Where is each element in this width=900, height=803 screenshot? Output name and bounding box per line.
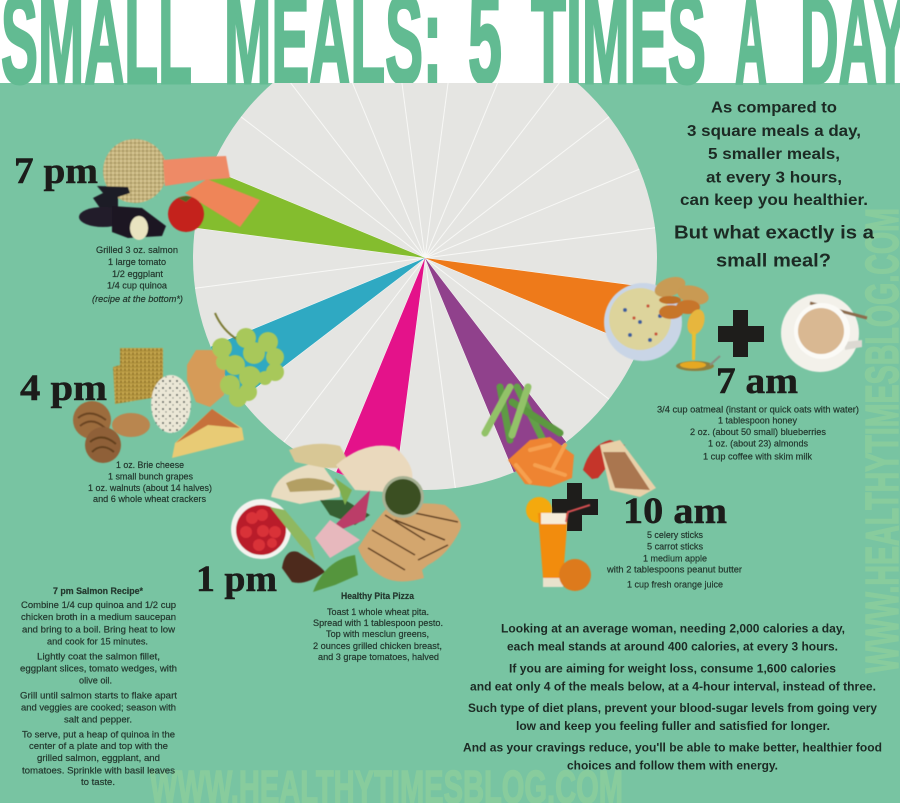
- food group: 4 pm: [73, 313, 284, 463]
- text: calories explanation: each meal stands at around 400 calories, at every 3 hours.: [507, 640, 838, 654]
- food group: 7 am: [604, 273, 867, 372]
- text: 7 am ingredients: [657, 405, 859, 461]
- text: salmon recipe: and cook for 15 minutes.: [47, 637, 148, 647]
- text: 10 am ingredients: 5 carrot sticks: [647, 541, 704, 551]
- text: 7 pm ingredients: [92, 245, 183, 304]
- food group: 10 am: [485, 387, 656, 497]
- text: salmon recipe: Lightly coat the salmon fillet,: [37, 651, 160, 661]
- text: pita pizza recipe: Healthy Pita Pizza: [341, 591, 415, 601]
- text: calories explanation: If you are aiming for weight loss, consume 1,600 calories: [509, 661, 836, 675]
- text: 10 am ingredients: 5 celery sticks: [647, 530, 703, 540]
- wedge: 7 am orange: [425, 258, 632, 333]
- text: 10 am label: 10 am: [623, 491, 727, 532]
- text: 4 pm ingredients: 1 small bunch grapes: [108, 472, 193, 482]
- text: pita pizza recipe: 2 ounces grilled chicken breast,: [313, 641, 442, 651]
- text: calories explanation: and eat only 4 of the meals below, at a 4-hour interval, instead of three.: [470, 679, 876, 693]
- text: intro top right: at every 3 hours,: [706, 169, 842, 186]
- text: intro top right: As compared to: [711, 100, 837, 117]
- text: salmon recipe: and veggies are cooked; season with: [21, 702, 176, 712]
- text: 7 pm ingredients: 1 large tomato: [108, 257, 166, 267]
- text: 10 am ingredients: 1 medium apple: [643, 554, 707, 564]
- text: calories explanation: [463, 622, 882, 772]
- text: pita pizza recipe: and 3 grape tomatoes, halved: [318, 652, 439, 662]
- text: 7 am label: 7 am: [716, 361, 798, 402]
- text: 4 pm ingredients: 1 oz. Brie cheese: [116, 460, 184, 470]
- wedge: 7 pm green: [195, 169, 425, 258]
- text: 1 pm label: 1 pm: [196, 559, 277, 600]
- text: 4 pm ingredients: [88, 460, 212, 504]
- icon: plus sign 10 am: [552, 483, 598, 531]
- text: 7 am ingredients: 1 tablespoon honey: [718, 416, 797, 426]
- text: intro top right: But what exactly is a: [674, 222, 875, 242]
- text: salmon recipe: to taste.: [81, 777, 115, 787]
- text: salmon recipe: grilled salmon, eggplant, and: [37, 753, 160, 763]
- text: 7 am ingredients: 1 cup coffee with skim milk: [703, 451, 813, 461]
- text: 7 am ingredients: 2 oz. (about 50 small) blueberries: [690, 427, 826, 437]
- text: 7 pm ingredients: (recipe at the bottom*): [92, 294, 183, 304]
- text: 4 pm ingredients: and 6 whole wheat crackers: [93, 494, 207, 504]
- text: calories explanation: And as your cravings reduce, you'll be able to make better, healthier food: [463, 740, 882, 754]
- text: calories explanation: low and keep you feeling fuller and satisfied for longer.: [516, 719, 830, 733]
- text: calories explanation: Looking at an average woman, needing 2,000 calories a day,: [501, 622, 845, 636]
- food group: 1 pm: [231, 444, 461, 592]
- text: salmon recipe: and bring to a boil. Bring heat to low: [22, 625, 176, 635]
- text: 7 pm ingredients: Grilled 3 oz. salmon: [96, 245, 178, 255]
- text: 7 pm ingredients: 1/4 cup quinoa: [107, 280, 167, 290]
- text: 7 pm label: 7 pm: [14, 151, 98, 192]
- text: 4 pm label: 4 pm: [20, 368, 107, 409]
- text: salmon recipe: To serve, put a heap of quinoa in the: [22, 729, 175, 739]
- text: pita pizza recipe: Top with mesclun greens,: [326, 629, 429, 639]
- text: 7 am ingredients: 1 oz. (about 23) almonds: [708, 439, 808, 449]
- text: intro top right: small meal?: [716, 251, 831, 271]
- text: intro top right: 5 smaller meals,: [708, 146, 840, 163]
- text: salmon recipe: center of a plate and top with the: [29, 741, 168, 751]
- text: salmon recipe: [20, 586, 178, 787]
- orange juice glass: [526, 497, 591, 591]
- text: salmon recipe: salt and pepper.: [64, 715, 132, 725]
- icon: plus sign 7 am: [718, 310, 764, 357]
- text: salmon recipe: Grill until salmon starts to flake apart: [20, 690, 178, 700]
- text: 10 am ingredients: [606, 530, 742, 589]
- wedge: 1 pm pink: [336, 258, 425, 488]
- text: salmon recipe: 7 pm Salmon Recipe*: [53, 586, 143, 596]
- text: intro top right: [674, 100, 875, 271]
- text: salmon recipe: Combine 1/4 cup quinoa and 1/2 cup: [21, 600, 176, 610]
- text: salmon recipe: tomatoes. Sprinkle with basil leaves: [22, 765, 176, 775]
- text: salmon recipe: olive oil.: [79, 676, 112, 686]
- title: [1, 0, 900, 110]
- text: intro top right: can keep you healthier.: [680, 192, 868, 209]
- text: 7 pm ingredients: 1/2 eggplant: [112, 269, 164, 279]
- wedge: 4 pm blue: [211, 258, 425, 399]
- text: intro top right: 3 square meals a day,: [687, 123, 861, 140]
- text: 10 am ingredients: 1 cup fresh orange juice: [627, 579, 723, 589]
- text: 10 am ingredients: with 2 tablespoons peanut butter: [606, 565, 742, 575]
- text: calories explanation: Such type of diet plans, prevent your blood-sugar levels from going very: [468, 701, 877, 715]
- wedge: 10 am purple: [425, 258, 566, 472]
- text: calories explanation: choices and follow them with energy.: [567, 758, 778, 772]
- text: salmon recipe: eggplant slices, tomato wedges, with: [20, 664, 177, 674]
- text: pita pizza recipe: Toast 1 whole wheat pita.: [327, 607, 429, 617]
- text: pita pizza recipe: Spread with 1 tablespoon pesto.: [313, 618, 443, 628]
- text: pita pizza recipe: [313, 591, 443, 662]
- food group: 7 pm: [79, 139, 260, 240]
- text: salmon recipe: chicken broth in a medium saucepan: [21, 612, 176, 622]
- clock chart: day wheel: [193, 83, 657, 490]
- text: 7 am ingredients: 3/4 cup oatmeal (instant or quick oats with water): [657, 405, 859, 415]
- text: 4 pm ingredients: 1 oz. walnuts (about 14 halves): [88, 483, 212, 493]
